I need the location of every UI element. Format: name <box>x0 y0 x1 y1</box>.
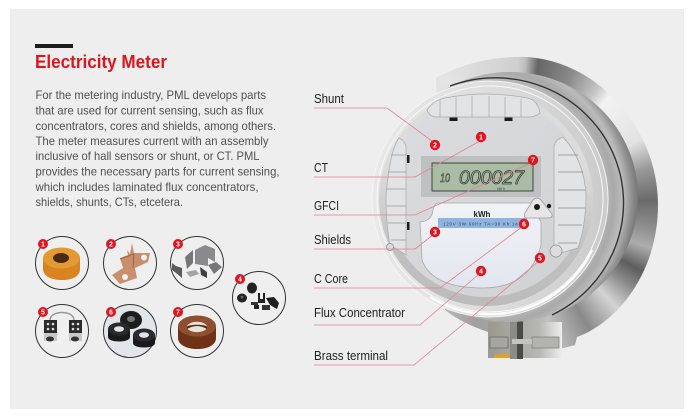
part thumbnail 3: laminated shields <box>170 236 224 290</box>
description text: The meter measures current with an assembly <box>36 134 268 148</box>
meter: LCD display <box>421 156 541 197</box>
part thumbnail 7: brown wound toroid <box>170 304 224 358</box>
description text: inclusive of hall sensors or shunt, or CT. PML <box>36 149 260 163</box>
part thumbnail 7: brown wound toroid: 7 <box>176 310 180 316</box>
meter: dark ring edge <box>450 78 624 315</box>
meter: nameplate: 120V 3W 60Hz TA=30 Kh 14.4 <box>443 222 524 226</box>
meter: seal screws <box>386 244 562 257</box>
meter marker 2: 2 <box>433 142 437 150</box>
part thumbnail 4: flux concentrators <box>232 272 286 324</box>
meter: LCD display: 000027 <box>459 168 525 189</box>
meter marker 1 <box>476 132 486 142</box>
meter marker 3 <box>430 227 440 237</box>
part thumbnail 4: flux concentrators: 4 <box>238 276 242 284</box>
callout labels: GFCI <box>314 199 339 213</box>
part thumbnail 2: copper shunt <box>104 236 156 290</box>
meter: nameplate <box>420 203 541 288</box>
description text: shields, shunts, CTs, etcetera. <box>36 195 183 209</box>
meter: LCD display: 10 <box>440 171 450 185</box>
meter marker 7 <box>528 155 538 165</box>
meter: top vent fins <box>427 94 540 117</box>
meter marker 1: 1 <box>479 134 483 142</box>
description text: that are used for current sensing, such as flux <box>36 104 264 118</box>
meter: inner housing ring <box>382 72 638 322</box>
part thumbnail 1: copper toroid <box>36 236 88 290</box>
meter: LCD display: kW h <box>497 187 505 191</box>
description text: provides the necessary parts for current sensing, <box>36 164 280 178</box>
description text: concentrators, cores and shields, among others. <box>36 119 276 133</box>
meter marker 4: 4 <box>479 268 483 276</box>
callout labels <box>314 92 405 363</box>
meter: top and side clips <box>407 118 558 232</box>
description text: which includes laminated flux concentrators, <box>35 180 258 194</box>
meter marker 4 <box>476 266 486 276</box>
part thumbnail 5: current transformer assembly <box>36 304 88 358</box>
part thumbnail 2: copper shunt: 2 <box>109 242 113 248</box>
meter marker 2 <box>430 140 440 150</box>
meter marker 6 <box>519 219 529 229</box>
meter chrome housing <box>436 56 658 348</box>
meter: right vent fins <box>554 137 586 255</box>
part thumbnail 6: black ferrite cores <box>104 304 156 358</box>
top accent bar <box>35 44 73 48</box>
description text: For the metering industry, PML develops parts <box>36 88 266 102</box>
meter: terminal block <box>488 320 562 359</box>
part thumbnail 1: copper toroid: 1 <box>41 242 45 248</box>
meter marker 3: 3 <box>433 230 437 236</box>
title: Electricity Meter <box>35 52 167 72</box>
meter: calibration triangle <box>524 198 552 218</box>
callout labels: Shunt <box>314 92 344 106</box>
callout labels: Shields <box>314 233 351 247</box>
description text <box>35 88 279 209</box>
part thumbnail 3: laminated shields: 3 <box>176 242 180 248</box>
meter: clear cover <box>372 81 608 317</box>
meter marker 7: 7 <box>531 158 535 164</box>
meter marker 5 <box>535 253 545 263</box>
part thumbnail 6: black ferrite cores: 6 <box>109 310 113 316</box>
meter: face plate <box>386 97 586 297</box>
callout labels: CT <box>314 161 328 175</box>
callout labels: C Core <box>314 272 348 286</box>
callout labels: Flux Concentrator <box>314 306 405 320</box>
part thumbnail 5: current transformer assembly: 5 <box>41 310 45 316</box>
meter marker 5: 5 <box>538 256 542 262</box>
callout labels: Brass terminal <box>314 349 388 363</box>
meter: nameplate: kWh <box>474 210 491 219</box>
callout leader lines <box>314 108 539 365</box>
meter marker 6: 6 <box>522 222 526 228</box>
meter: left vent fins <box>386 138 406 255</box>
